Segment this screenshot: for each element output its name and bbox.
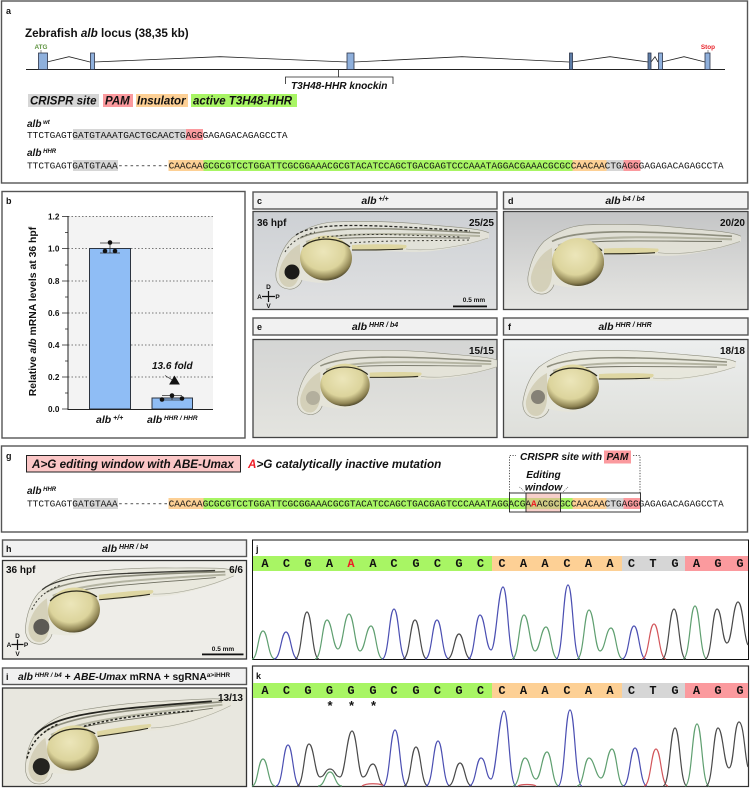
- scale bar h: 0.5 mm: [212, 646, 234, 653]
- base strip j: A: [606, 557, 614, 571]
- orientation c: [257, 284, 280, 310]
- grid: [68, 216, 213, 377]
- base strip k: A: [261, 684, 269, 698]
- orientation h: D: [15, 633, 20, 640]
- edited base asterisks: *: [327, 698, 333, 713]
- image f: [504, 340, 748, 438]
- base strip k: G: [347, 684, 355, 698]
- base strip j: A: [326, 557, 334, 571]
- editing window label: [520, 470, 568, 494]
- knockin bracket: [286, 70, 393, 92]
- axes: [62, 216, 213, 410]
- scale bar h: [202, 646, 244, 655]
- edited base asterisks: [327, 698, 377, 713]
- base strip j: C: [498, 557, 506, 571]
- panel i: alb: [18, 672, 33, 683]
- alb HHR sequence: [27, 148, 724, 172]
- editing window label: Editing: [526, 470, 562, 481]
- panel i: [2, 668, 246, 786]
- panel e: e: [257, 322, 262, 332]
- label j: j: [255, 544, 259, 554]
- ATG label: ATG: [34, 44, 48, 51]
- base strip k: A: [541, 684, 549, 698]
- panel d: b4 / b4: [621, 196, 645, 203]
- base strip k: G: [736, 684, 744, 698]
- base strip j: C: [628, 557, 635, 571]
- zebrafish i: [25, 698, 231, 784]
- stop label: Stop: [701, 44, 715, 51]
- base strip j: G: [304, 557, 312, 571]
- panel k: chromatogram: [252, 666, 748, 786]
- orientation h: P: [24, 642, 29, 649]
- panel i: +: [62, 672, 74, 683]
- header i: [2, 668, 246, 684]
- base strip j: G: [714, 557, 722, 571]
- plot area: [68, 216, 213, 409]
- base strip k: G: [412, 684, 420, 698]
- panel c: c: [257, 196, 262, 206]
- knockin bracket: T3H48-HHR knockin: [291, 81, 387, 92]
- base strip k: A: [606, 684, 614, 698]
- base strip j: A: [541, 557, 549, 571]
- base strip k: G: [455, 684, 463, 698]
- base strip k: C: [434, 684, 441, 698]
- base strip j: C: [390, 557, 398, 571]
- y axis title: Relative alb mRNA levels at 36 hpf: [28, 226, 39, 396]
- orientation c: A: [257, 294, 262, 301]
- scale bar c: 0.5 mm: [463, 297, 485, 304]
- alb HHR sequence: HHR: [41, 149, 57, 155]
- count e: 15/15: [469, 346, 494, 357]
- panel c: [253, 192, 497, 310]
- fold arrow: [165, 376, 179, 384]
- header e: [253, 318, 497, 335]
- alb wt sequence: [27, 119, 288, 141]
- panel h: 6/6: [229, 565, 243, 576]
- orientation c: D: [266, 284, 271, 291]
- gene model: [26, 44, 725, 70]
- y tick labels: 0.6: [48, 309, 60, 318]
- error bars and points: [100, 240, 184, 402]
- base strip k: G: [714, 684, 722, 698]
- base strip k: C: [498, 684, 506, 698]
- zebrafish h: [25, 568, 234, 644]
- panel i: HHR / b4: [33, 672, 62, 679]
- header c: [253, 192, 497, 209]
- panel d: alb: [605, 195, 621, 207]
- alb wt sequence: wt: [41, 120, 51, 126]
- panel f: HHR / HHR: [614, 322, 652, 329]
- base strip k: T: [649, 684, 657, 698]
- y tick labels: 0.4: [48, 341, 60, 350]
- label b: b: [6, 196, 12, 206]
- CRISPR bracket: [510, 450, 640, 493]
- base strip j: G: [412, 557, 420, 571]
- base strip j: [253, 556, 748, 571]
- alb HHR sequence: alb: [27, 148, 41, 159]
- orientation h: [7, 633, 29, 658]
- edited base asterisks: *: [371, 698, 377, 713]
- alb HHR label: alb: [27, 486, 41, 497]
- editing window legend: A>G editing window with ABE-Umax: [31, 458, 234, 471]
- y tick labels: 1.2: [48, 212, 60, 222]
- base strip k: G: [671, 684, 679, 698]
- legend: PAM: [105, 96, 130, 108]
- base strip k: G: [326, 684, 333, 698]
- base strip k: C: [477, 684, 484, 698]
- alb HHR sequence: TTCTGAGTGATGTAAA---------CAACAAGCGCGTCCTGGATTCGCGGAAACGCGTACATCCAGCTGACGAGTCCCAAATAGGACGAAACGCGCCAACAACTGAGGGAGAGACAGAGCCTA: [27, 160, 724, 172]
- sequence: [27, 493, 724, 512]
- orientation c: P: [275, 294, 280, 301]
- orientation h: A: [7, 642, 12, 649]
- trace k: [252, 710, 748, 786]
- zebrafish c: [276, 221, 489, 289]
- panel i: a>iHHR: [207, 672, 230, 679]
- fold annotation: 13.6 fold: [152, 361, 193, 372]
- y tick labels: 0.8: [48, 277, 60, 286]
- panel j: chromatogram: [252, 540, 748, 660]
- y tick labels: 0.0: [48, 405, 60, 414]
- base strip k: G: [304, 684, 312, 698]
- header d: [504, 192, 748, 209]
- panel h: alb: [102, 543, 117, 555]
- panel d: d: [508, 196, 514, 206]
- y tick labels: 0.2: [48, 373, 60, 382]
- x labels: alb: [96, 414, 111, 426]
- panel e: alb: [352, 321, 367, 333]
- base strip j: A: [585, 557, 593, 571]
- panel b: bar chart: [2, 192, 245, 438]
- x labels: +/+: [111, 415, 123, 422]
- panel c: alb: [361, 195, 377, 207]
- header f: [504, 318, 748, 335]
- panel f: alb: [598, 321, 614, 333]
- base strip j: C: [283, 557, 290, 571]
- legend: Insulator: [137, 96, 186, 108]
- base strip j: A: [693, 557, 701, 571]
- panel f: f: [508, 322, 512, 332]
- scale bar c: [453, 297, 487, 307]
- base strip k: C: [628, 684, 635, 698]
- base strip j: G: [671, 557, 679, 571]
- CRISPR bracket: CRISPR site with: [520, 452, 602, 463]
- base strip j: C: [434, 557, 441, 571]
- base strip j: A: [347, 557, 355, 571]
- alb wt sequence: TTCTGAGTGATGTAAATGACTGCAACTGAGGGAGAGACAGAGCCTA: [27, 130, 288, 141]
- base strip j: A: [261, 557, 269, 571]
- image d: [504, 212, 748, 310]
- legend: CRISPR site: [30, 96, 97, 108]
- legend: active T3H48-HHR: [193, 96, 293, 108]
- bar: alb +/+: [90, 248, 130, 409]
- panel i: i: [6, 672, 9, 682]
- mutation legend: A>G catalytically inactive mutation: [247, 458, 441, 471]
- legend: [28, 94, 297, 108]
- sequence: TTCTGAGTGATGTAAA---------CAACAAGCGCGTCCTGGATTCGCGGAAACGCGTACATCCAGCTGACGAGTCCCAAATAGGACGAAACGCGCCAACAACTGAGGGAGAGACAGAGCCTA: [27, 498, 724, 510]
- base strip k: C: [563, 684, 571, 698]
- label k: k: [256, 671, 262, 681]
- panel e: [253, 318, 500, 438]
- alb HHR label: HHR: [41, 487, 57, 493]
- y tick labels: [48, 212, 60, 414]
- panel c: +/+: [377, 196, 389, 203]
- label a: a: [6, 6, 12, 16]
- base strip k: A: [693, 684, 701, 698]
- panel a: alb locus: [2, 1, 748, 183]
- y tick labels: 1.0: [48, 244, 60, 254]
- trace j: [252, 585, 748, 659]
- label g: g: [6, 451, 12, 461]
- orientation c: V: [266, 303, 271, 310]
- base strip j: C: [477, 557, 484, 571]
- base strip j: T: [649, 557, 657, 571]
- base strip j: C: [563, 557, 571, 571]
- panel h: h: [6, 544, 12, 554]
- base strip k: [253, 683, 748, 698]
- stage label h: 36 hpf: [6, 565, 36, 576]
- stage label c: 36 hpf: [257, 218, 287, 229]
- base strip k: C: [283, 684, 290, 698]
- image h: [2, 560, 246, 659]
- panel d: [504, 192, 748, 310]
- bar: alb HHR/HHR: [152, 398, 192, 409]
- image i: [2, 688, 246, 786]
- panel b: bar chart: HHR / HHR: [162, 415, 198, 422]
- panel e: HHR / b4: [367, 322, 398, 329]
- header h: [2, 540, 246, 556]
- base strip k: G: [369, 684, 377, 698]
- base strip j: A: [369, 557, 377, 571]
- panel c: 25/25: [469, 218, 494, 229]
- count i: 13/13: [218, 693, 243, 704]
- zebrafish d: [528, 224, 741, 294]
- base strip j: G: [736, 557, 744, 571]
- panel f: [504, 318, 748, 438]
- count f: 18/18: [720, 346, 745, 357]
- editing window label: window: [525, 482, 563, 494]
- count d: 20/20: [720, 218, 745, 229]
- image e: [253, 340, 497, 438]
- image c: [253, 212, 497, 310]
- panel g: editing strategy: [2, 446, 748, 532]
- base strip k: C: [390, 684, 398, 698]
- base strip j: A: [520, 557, 528, 571]
- panel b: bar chart: alb: [147, 414, 162, 426]
- base strip k: A: [585, 684, 593, 698]
- panel i: ABE-Umax mRNA + sgRNA: [74, 672, 207, 683]
- title: Zebrafish alb locus (38,35 kb): [25, 27, 189, 40]
- zebrafish e: [297, 350, 500, 415]
- edited base asterisks: *: [349, 698, 355, 713]
- panel h: [2, 540, 246, 659]
- CRISPR bracket: PAM: [606, 452, 629, 463]
- alb wt sequence: alb: [27, 119, 41, 130]
- panel h: HHR / b4: [117, 544, 148, 551]
- base strip k: A: [520, 684, 528, 698]
- base strip j: G: [455, 557, 463, 571]
- zebrafish f: [523, 350, 736, 418]
- orientation h: V: [15, 651, 20, 658]
